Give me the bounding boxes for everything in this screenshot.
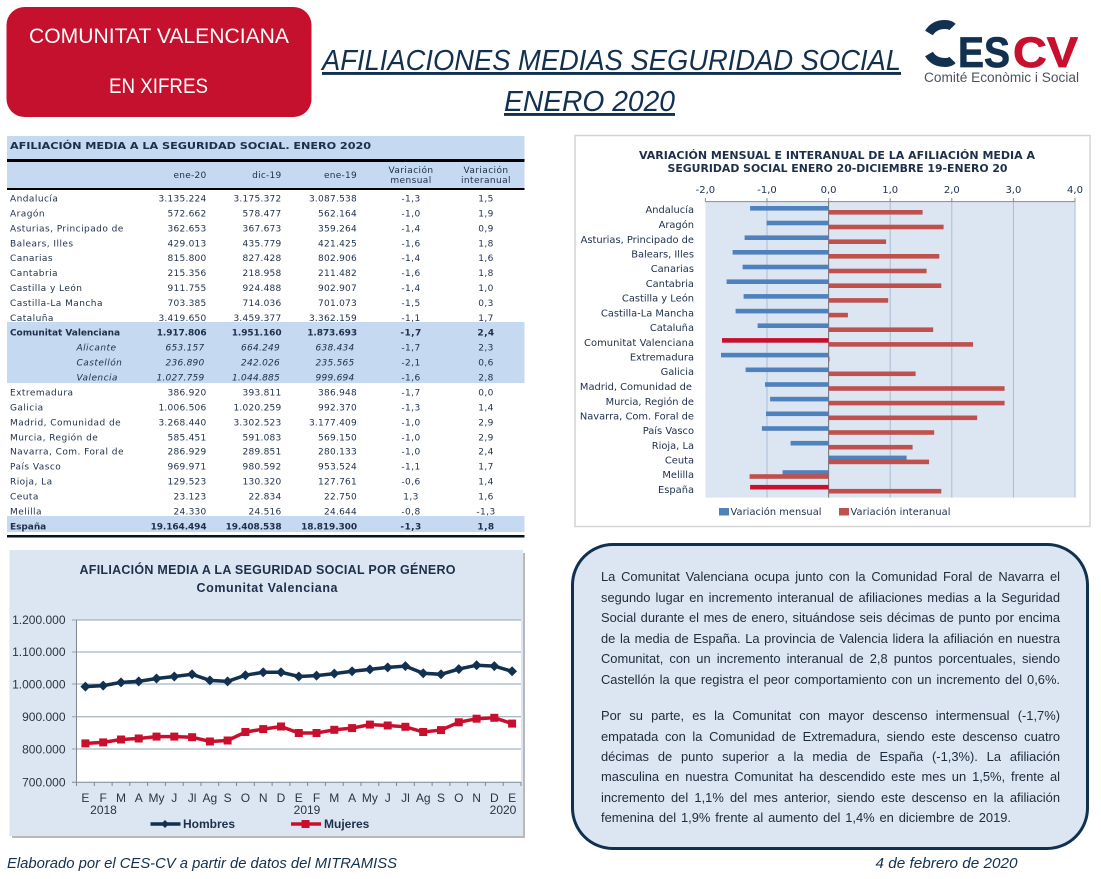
table rows: Murcia, Región de <box>10 432 98 444</box>
paragraph 2: incremento del 1,1% del mes anterior, siendo este descenso en la afiliación <box>601 790 1060 804</box>
table rows: -1,7 <box>400 328 422 338</box>
table rows: 359.264 <box>318 224 357 234</box>
x axis labels: 2019 <box>294 803 321 817</box>
table rows: -1,4 <box>401 284 421 294</box>
table rows: -1,1 <box>401 462 421 472</box>
table rows: -1,6 <box>401 240 421 250</box>
table rows: Balears, Illes <box>10 240 74 250</box>
x axis labels: Ag <box>203 791 217 805</box>
y axis labels: 1.100.000 <box>12 645 66 659</box>
category labels: Melilla <box>662 470 694 481</box>
table rows: 18.819.300 <box>301 522 357 532</box>
category labels: Navarra, Com. Foral de <box>580 412 694 422</box>
table rows: 1,4 <box>478 404 494 414</box>
table rows: -1,6 <box>401 269 421 279</box>
table rows: 24.644 <box>324 508 357 518</box>
chart title: VARIACIÓN MENSUAL E INTERANUAL DE LA AFILIACIÓN MEDIA A <box>639 149 1035 162</box>
table rows: 992.370 <box>318 404 357 414</box>
table rows: 2,9 <box>478 434 494 444</box>
table rows: 1,8 <box>478 269 494 279</box>
table rows: Melilla <box>10 508 42 518</box>
x axis labels: D <box>490 791 499 805</box>
axis labels <box>696 185 1083 196</box>
x axis labels: F <box>100 791 107 805</box>
table rows: 953.524 <box>318 462 357 472</box>
table rows: Madrid, Comunidad de <box>10 418 121 428</box>
table rows: 130.320 <box>243 478 282 488</box>
category labels: Comunitat Valenciana <box>584 338 694 349</box>
x axis labels: D <box>277 791 286 805</box>
x axis labels: F <box>313 791 320 805</box>
header badge: Comunitat Valenciana en xifres: COMUNITAT VALENCIANA <box>29 25 289 48</box>
paragraph 1 <box>601 569 1060 687</box>
table rows <box>10 194 496 532</box>
category labels: Castilla-La Mancha <box>601 308 694 320</box>
x axis labels: E <box>508 791 516 805</box>
monthly variation bars <box>721 206 907 490</box>
table rows: 289.851 <box>243 448 282 458</box>
table rows: 3.419.650 <box>158 314 207 324</box>
table rows: Canarias <box>10 254 53 264</box>
table rows: 24.516 <box>248 508 282 518</box>
table rows: 703.385 <box>168 299 206 309</box>
paragraph 2 <box>601 708 1060 825</box>
logo: CES-CV: Comité Econòmic i Social <box>924 70 1079 85</box>
table rows: 286.929 <box>168 448 207 458</box>
category labels: Ceuta <box>665 456 694 466</box>
table rows: 924.488 <box>243 284 282 294</box>
paragraph 2: Por su parte, es la Comunitat con mayor descenso intermensual (-1,7%) <box>601 708 1060 722</box>
x axis labels: M <box>116 791 126 805</box>
axis labels: 0,0 <box>821 185 837 196</box>
table rows: -1,3 <box>401 194 421 204</box>
axis labels: 3,0 <box>1005 185 1021 196</box>
table rows: Valencia <box>76 374 118 384</box>
table rows: Andalucía <box>10 194 58 204</box>
table header row: Variación <box>464 165 508 176</box>
table rows: 1.027.759 <box>156 374 205 384</box>
table rows: 2,3 <box>478 344 494 354</box>
table rows: 393.811 <box>243 388 282 398</box>
axis labels: -2,0 <box>696 185 715 196</box>
table rows: -1,3 <box>401 404 421 414</box>
x axis labels: A <box>135 791 143 805</box>
category labels: Balears, Illes <box>631 250 694 260</box>
table rows: 0,6 <box>478 358 494 368</box>
table rows: 127.761 <box>318 478 357 488</box>
panel: bar chart of monthly and annual variation <box>574 134 1091 528</box>
table rows: Castellón <box>76 358 122 368</box>
paragraph 1: segundo lugar en incremento interanual de afiliaciones medias a la Seguridad <box>601 590 1060 605</box>
x axis labels: Jl <box>188 791 196 805</box>
x axis labels: N <box>472 791 481 805</box>
x axis labels: 2018 <box>90 803 117 817</box>
table rows: Cantabria <box>10 269 58 279</box>
category labels: Asturias, Principado de <box>581 235 694 246</box>
table rows: 3.268.440 <box>158 418 207 428</box>
paragraph 1: Social durante el mes de enero, situándose seis décimas de punto por encima <box>601 610 1060 625</box>
x axis labels: My <box>148 791 164 805</box>
table header row: mensual <box>390 176 432 186</box>
x axis labels: Ag <box>416 791 431 805</box>
category labels: España <box>658 485 694 496</box>
category labels: Galicia <box>661 367 694 378</box>
table rows: 562.164 <box>318 210 357 220</box>
logo: CES-CV <box>924 20 1079 85</box>
table rows: 23.123 <box>174 492 206 502</box>
category labels: Madrid, Comunidad de <box>580 382 692 393</box>
table rows: 827.428 <box>243 254 282 264</box>
category labels: Murcia, Región de <box>606 396 694 408</box>
table rows: 0,0 <box>478 388 494 398</box>
y axis labels: 800.000 <box>22 742 66 756</box>
table rows: 1,5 <box>478 194 494 204</box>
table rows: 429.013 <box>168 240 206 250</box>
table rows: Comunitat Valenciana <box>10 328 120 338</box>
table rows: 1.006.506 <box>158 404 207 414</box>
y axis labels <box>12 613 66 790</box>
category labels: Aragón <box>659 219 694 231</box>
category labels: Castilla y León <box>622 292 694 304</box>
y axis labels: 1.200.000 <box>12 613 66 627</box>
table rows: 3.362.159 <box>309 314 357 324</box>
chart title <box>80 562 456 595</box>
table rows: -1,1 <box>401 314 421 324</box>
table rows: 362.653 <box>168 224 206 234</box>
x axis labels: O <box>241 791 250 805</box>
table header row <box>174 165 511 186</box>
table rows: 215.356 <box>168 269 207 279</box>
table rows: 1,9 <box>478 210 494 220</box>
paragraph 1: La Comunitat Valenciana ocupa junto con la Comunidad Foral de Navarra el <box>601 569 1060 584</box>
table rows: 1,8 <box>477 522 495 532</box>
category labels <box>580 204 694 496</box>
table rows: 1,7 <box>478 462 494 472</box>
x axis labels: E <box>295 791 303 805</box>
chart title: AFILIACIÓN MEDIA A LA SEGURIDAD SOCIAL POR GÉNERO <box>80 562 456 577</box>
paragraph 2: masculina en nuestra Comunitat ha descendido este mes un 1,5%, frente al <box>601 769 1060 784</box>
category labels: Canarias <box>651 264 694 275</box>
table rows: 2,9 <box>478 418 494 428</box>
table rows: 1.951.160 <box>232 328 282 338</box>
legend: Hombres <box>183 817 235 831</box>
table rows: -1,3 <box>476 508 496 518</box>
table rows: -0,6 <box>401 478 421 488</box>
chart title: Comunitat Valenciana <box>196 581 339 595</box>
table rows: 911.755 <box>168 284 206 294</box>
category labels: País Vasco <box>643 425 694 437</box>
table rows: 2,4 <box>477 328 495 338</box>
table rows: 572.662 <box>168 210 206 220</box>
table rows: Galicia <box>10 404 44 414</box>
header badge: Comunitat Valenciana en xifres: EN XIFRES <box>109 75 208 98</box>
y axis labels: 900.000 <box>22 710 66 724</box>
table rows: 0,3 <box>478 299 494 309</box>
x axis labels: A <box>348 791 356 805</box>
table rows: 280.133 <box>318 448 357 458</box>
legend <box>150 817 370 831</box>
table rows: 3.175.372 <box>233 194 282 204</box>
footer date: 4 de febrero de 2020 <box>876 855 1018 872</box>
table rows: 1.044.885 <box>232 374 280 384</box>
table rows: 802.906 <box>318 254 357 264</box>
table header row: ene-20 <box>174 171 207 181</box>
table rows: 902.907 <box>318 284 357 294</box>
x axis labels <box>81 791 517 817</box>
table rows: 242.026 <box>241 358 280 368</box>
table rows: Navarra, Com. Foral de <box>10 448 124 458</box>
table rows: -1,4 <box>401 224 421 234</box>
table rows: 1,0 <box>478 284 494 294</box>
table rows: 701.073 <box>318 299 357 309</box>
axis labels: 4,0 <box>1067 185 1083 196</box>
line: Hombres <box>85 665 512 687</box>
y axis labels: 1.000.000 <box>12 678 66 692</box>
legend: Mujeres <box>324 817 370 831</box>
title: ENERO 2020 <box>504 86 675 118</box>
table header row: ene-19 <box>324 171 357 181</box>
annual variation bars <box>750 210 1005 494</box>
x axis labels: E <box>81 791 89 805</box>
table rows: 22.750 <box>324 492 357 502</box>
table rows: -1,7 <box>401 344 421 354</box>
table rows: 3.135.224 <box>158 194 207 204</box>
table rows: 1,6 <box>478 492 494 502</box>
table rows: 1,6 <box>478 254 494 264</box>
paragraph 1: Comunitat, con un incremento interanual de 2,8 puntos porcentuales, siendo <box>601 651 1060 666</box>
table rows: 22.834 <box>248 492 282 502</box>
table rows: 1.917.806 <box>157 328 206 338</box>
table rows: 367.673 <box>243 224 282 234</box>
table rows: Asturias, Principado de <box>10 224 124 234</box>
table rows: 980.592 <box>243 462 282 472</box>
x axis labels: 2020 <box>490 803 517 817</box>
table rows: 999.694 <box>316 374 355 384</box>
table rows: País Vasco <box>10 462 61 472</box>
y axis labels: 700.000 <box>22 776 66 790</box>
table rows: Ceuta <box>10 492 39 502</box>
table rows: España <box>10 522 46 532</box>
table rows: 1.020.259 <box>233 404 282 414</box>
table rows: 664.249 <box>241 344 280 354</box>
table rows: Extremadura <box>10 388 73 398</box>
logo: CES-CV: CV <box>1013 29 1078 77</box>
category labels: Cantabria <box>646 279 694 290</box>
table rows: -1,7 <box>401 388 421 398</box>
table rows: Rioja, La <box>10 478 53 488</box>
paragraph 1: de la media de España. La provincia de Valencia lidera la afiliación en nuestra <box>601 630 1060 646</box>
table rows: -1,0 <box>401 418 421 428</box>
table rows: 435.779 <box>243 240 282 250</box>
category labels: Cataluña <box>650 323 694 334</box>
paragraph 2: femenina del 1,9% frente al aumento del 1,4% en diciembre de 2019. <box>601 810 1011 825</box>
table rows: -1,5 <box>401 299 421 309</box>
legend: Variación mensual <box>730 506 822 518</box>
table rows: 591.083 <box>243 434 282 444</box>
table rows: 3.087.538 <box>309 194 357 204</box>
title <box>320 45 901 118</box>
panel: data table <box>7 136 524 538</box>
x axis labels: S <box>437 791 445 805</box>
table rows: 19.408.538 <box>226 522 282 532</box>
table rows: -1,6 <box>401 374 421 384</box>
table rows: 1,7 <box>478 314 494 324</box>
x axis labels: Jl <box>401 791 410 805</box>
table rows: 969.971 <box>168 462 206 472</box>
x axis labels: J <box>171 791 177 805</box>
x axis labels: M <box>329 791 339 805</box>
paragraph 1: Castellón la que registra el peor comportamiento con un incremento del 0,6%. <box>601 672 1060 687</box>
table header row: interanual <box>461 176 511 186</box>
x axis labels: My <box>362 791 378 805</box>
table rows: 236.890 <box>166 358 205 368</box>
paragraph 2: empatada con la Comunidad de Extremadura, siendo este descenso cuatro <box>601 728 1060 744</box>
chart title: SEGURIDAD SOCIAL ENERO 20-DICIEMBRE 19-ENERO 20 <box>668 164 1008 175</box>
table rows: 386.920 <box>168 388 207 398</box>
table rows: 714.036 <box>243 299 282 309</box>
legend <box>719 506 950 518</box>
table header row: dic-19 <box>252 171 282 181</box>
paragraph 2: décimas de punto superior a la media de España (-1,3%). La afiliación <box>601 748 1060 764</box>
chart title <box>639 149 1035 175</box>
table rows: -1,0 <box>401 448 421 458</box>
table bands <box>7 136 524 538</box>
table rows: 815.800 <box>168 254 207 264</box>
table rows: 1,4 <box>478 478 494 488</box>
footer source: Elaborado por el CES-CV a partir de datos del MITRAMISS <box>7 855 397 872</box>
table rows: 585.451 <box>168 434 206 444</box>
category labels: Extremadura <box>630 352 694 364</box>
table rows: 1,8 <box>478 240 494 250</box>
line: Mujeres <box>85 718 512 743</box>
table rows: 3.302.523 <box>233 418 282 428</box>
category labels: Andalucía <box>645 204 694 216</box>
table rows: 569.150 <box>318 434 357 444</box>
axis labels: 1,0 <box>882 185 898 196</box>
table rows: 638.434 <box>316 344 355 354</box>
table rows: -1,3 <box>400 522 422 532</box>
table rows: 1.873.693 <box>307 328 357 338</box>
panel: line chart by gender <box>10 550 525 838</box>
table rows: 19.164.494 <box>151 522 206 532</box>
table rows: 235.565 <box>316 358 355 368</box>
table rows: 24.330 <box>174 508 207 518</box>
table rows: 218.958 <box>243 269 282 279</box>
table rows: 2,4 <box>478 448 494 458</box>
axis labels: -1,0 <box>757 185 777 196</box>
table rows: 0,9 <box>478 224 494 234</box>
plot area <box>705 198 1075 498</box>
panel: commentary text <box>571 543 1089 850</box>
plot area <box>72 620 521 786</box>
table title: AFILIACIÓN MEDIA A LA SEGURIDAD SOCIAL. ENERO 2020 <box>10 139 371 152</box>
axis labels: 2,0 <box>944 185 960 196</box>
logo: CES-CV: ES <box>958 29 1010 77</box>
x axis labels: N <box>259 791 268 805</box>
table rows: 129.523 <box>168 478 206 488</box>
table rows: -0,8 <box>401 508 421 518</box>
table rows: Aragón <box>10 208 45 220</box>
table rows: 578.477 <box>243 210 282 220</box>
table rows: 2,8 <box>478 374 494 384</box>
header badge: Comunitat Valenciana en xifres <box>6 7 312 117</box>
table rows: 421.425 <box>318 240 357 250</box>
table rows: 3.177.409 <box>309 418 357 428</box>
table rows: -1,4 <box>401 254 421 264</box>
table rows: Castilla y León <box>10 283 82 294</box>
table rows: Castilla-La Mancha <box>10 299 103 309</box>
table rows: Cataluña <box>10 314 54 324</box>
table rows: -1,0 <box>401 434 421 444</box>
category labels: Rioja, La <box>652 441 694 452</box>
table rows: 1,3 <box>403 492 419 502</box>
table rows: -1,0 <box>401 210 421 220</box>
x axis labels: O <box>454 791 463 805</box>
x axis labels: S <box>224 791 232 805</box>
x axis labels: J <box>385 791 391 805</box>
table header row: Variación <box>389 165 433 176</box>
table rows: 386.948 <box>318 388 357 398</box>
table rows: 211.482 <box>318 269 357 279</box>
legend: Variación interanual <box>850 506 950 518</box>
table rows: -2,1 <box>401 358 421 368</box>
table rows: 3.459.377 <box>233 314 282 324</box>
table rows: 653.157 <box>166 344 205 354</box>
table rows: Alicante <box>76 344 117 354</box>
